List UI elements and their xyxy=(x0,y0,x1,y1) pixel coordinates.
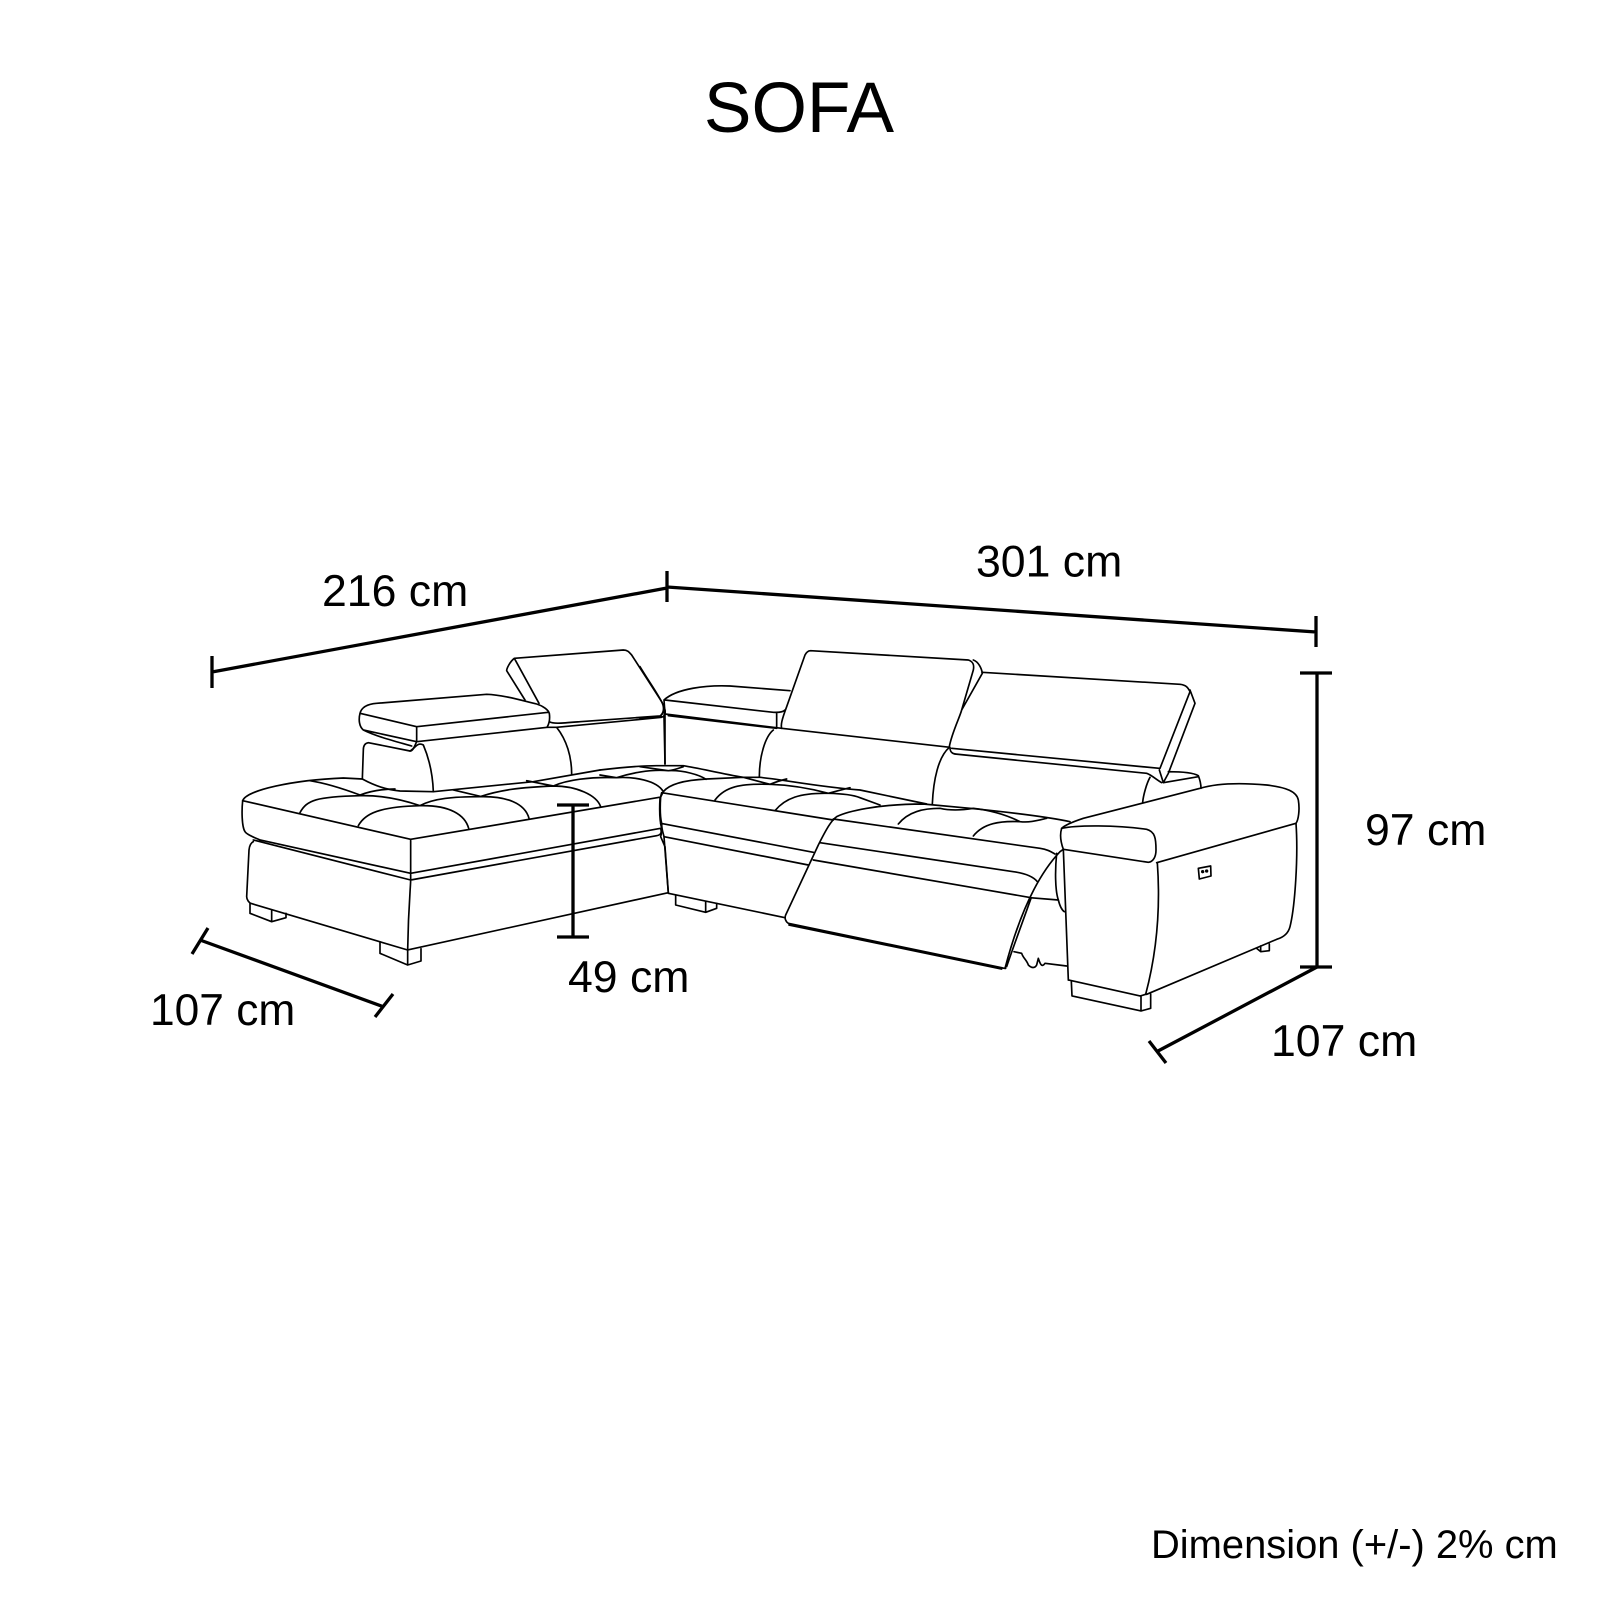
side fold and mechanism xyxy=(1014,853,1067,967)
recliner seat body xyxy=(660,797,1058,918)
recliner section xyxy=(600,651,1070,969)
reclining headrest xyxy=(781,651,982,754)
chaise legs xyxy=(250,903,421,965)
dimension line: 107 cm left xyxy=(192,928,393,1017)
armrest front xyxy=(1061,826,1156,862)
arm base xyxy=(1068,980,1151,1011)
label: 97 cm: 97 cm xyxy=(1365,806,1486,855)
recliner tufting xyxy=(715,784,1047,836)
label: 49 cm: 49 cm xyxy=(568,953,689,1002)
rear leg xyxy=(1257,944,1269,952)
chaise backrest xyxy=(410,727,572,792)
recliner seat top xyxy=(600,766,927,820)
right armrest section xyxy=(952,672,1299,1011)
dimension line: 301 cm xyxy=(667,587,1316,647)
small side headrest xyxy=(664,686,790,728)
corner seam xyxy=(660,792,668,893)
label: 301 cm: 301 cm xyxy=(976,538,1122,586)
chaise base xyxy=(247,842,668,950)
right headrest xyxy=(952,672,1201,802)
sofa line drawing xyxy=(242,650,1299,1011)
raised corner headrest xyxy=(507,650,665,764)
chaise cushion front xyxy=(242,797,661,950)
recliner leg xyxy=(676,895,717,912)
arm body xyxy=(1063,823,1297,994)
backrest seams xyxy=(640,667,949,804)
label: 216 cm: 216 cm xyxy=(322,567,468,616)
dimension line: 49 cm xyxy=(557,805,589,937)
icon: recline button xyxy=(1198,866,1211,879)
dimension line: 97 cm xyxy=(1300,673,1332,967)
armrest top xyxy=(1062,784,1299,863)
chaise section xyxy=(242,650,706,965)
title: SOFA xyxy=(704,68,895,148)
footnote: Dimension (+/-) 2% cm xyxy=(1151,1523,1558,1567)
low headrest xyxy=(359,694,550,779)
raised footrest xyxy=(785,804,1070,969)
label: 107 cm right: 107 cm xyxy=(1271,1017,1417,1066)
label: 107 cm left: 107 cm xyxy=(150,986,295,1035)
dimension line: 216 cm xyxy=(212,571,667,688)
chaise tufting xyxy=(300,767,706,828)
dimension line: 107 cm right xyxy=(1149,967,1317,1063)
chaise seat top outline xyxy=(243,770,600,801)
